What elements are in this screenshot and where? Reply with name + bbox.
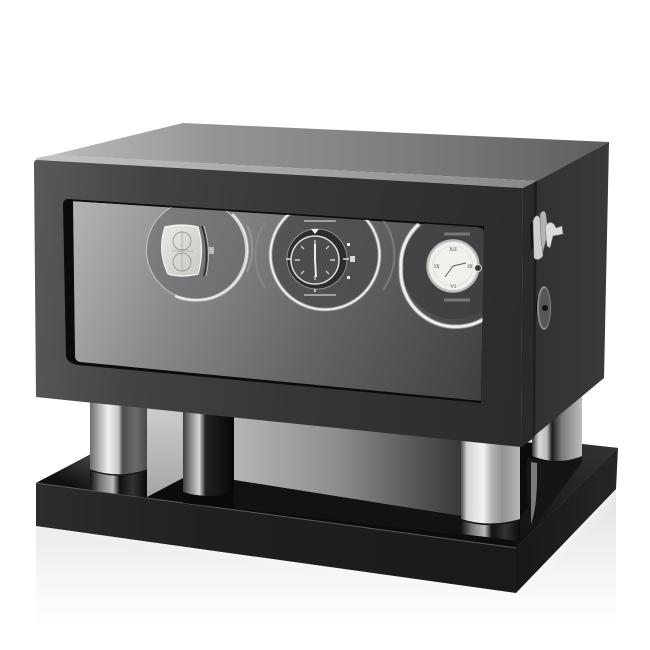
- watch: white roman dial: XII: [449, 247, 457, 253]
- side lock: [536, 286, 551, 330]
- cabinet side face: [521, 142, 609, 447]
- base top right reflection: [505, 444, 618, 548]
- cabinet top front lip: [36, 155, 537, 188]
- watch: white roman dial: [428, 240, 482, 292]
- floor reflection: [36, 490, 616, 584]
- glass window: [72, 200, 506, 401]
- pillar: front right: [461, 435, 520, 541]
- pillars: [90, 390, 582, 541]
- back wall seen under cabinet: [234, 410, 461, 516]
- base side face: [516, 448, 618, 593]
- watch: white roman dial: III: [467, 264, 473, 270]
- pillar: mid left: [183, 405, 234, 509]
- window recess: [63, 199, 484, 403]
- pillar: back right: [526, 390, 582, 530]
- winder: middle: [255, 200, 394, 310]
- cabinet door edge: [521, 182, 536, 447]
- gap between left pillars: [147, 400, 183, 497]
- base front face: [36, 483, 516, 593]
- watch: white roman dial: VI: [450, 284, 456, 290]
- watch: tonneau skeleton: [162, 225, 214, 276]
- winder: left: [146, 200, 252, 300]
- cabinet: [34, 123, 609, 447]
- pillar: back left: [90, 395, 147, 498]
- base top surface: [36, 431, 618, 548]
- illustration: three-watch winder cabinet on pillared base: [34, 123, 618, 593]
- reflection of back wall on base: [234, 480, 461, 535]
- cabinet front face: [34, 160, 523, 447]
- glass pane: [72, 201, 484, 401]
- watch: dive chronograph: [286, 229, 355, 292]
- cabinet top face: [52, 123, 609, 181]
- winder: right: [398, 223, 484, 330]
- base top left reflection: [36, 450, 100, 491]
- hinge latch: [530, 211, 563, 260]
- watch: white roman dial: IX: [434, 264, 440, 270]
- base front highlight edge: [36, 483, 516, 548]
- base plinth: [36, 431, 618, 593]
